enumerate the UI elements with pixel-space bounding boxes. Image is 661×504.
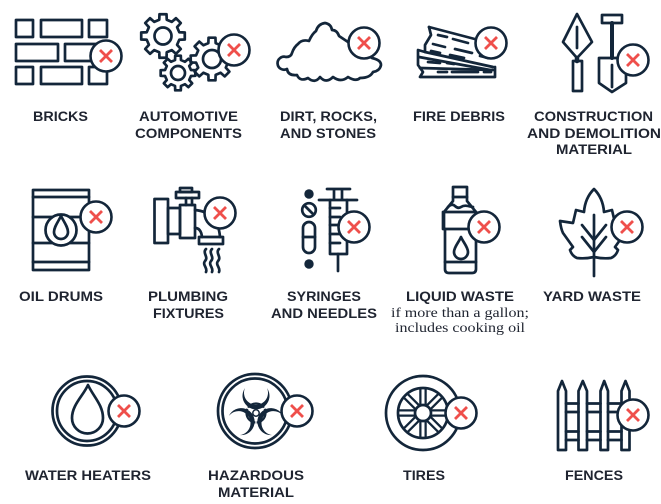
badge: not accepted: [348, 28, 380, 58]
item: oil drums: [19, 190, 112, 304]
label: hazardous material: [208, 468, 304, 500]
label: water heaters: WATER HEATERS: [25, 468, 151, 483]
badge: not accepted: [612, 212, 642, 242]
icon: tire and wheel: [386, 376, 460, 450]
item: liquid waste: [391, 187, 529, 336]
icon: syringe and pills: [302, 189, 357, 271]
label: syringes and needles: SYRINGES: [287, 289, 361, 304]
label: oil drums: OIL DRUMS: [19, 289, 103, 304]
icon: faucet and pipe: [154, 188, 223, 272]
label: construction and demolition material: [527, 109, 661, 157]
label: dirt, rocks, and stones: DIRT, ROCKS,: [280, 109, 377, 124]
item: hazardous material: [208, 374, 312, 500]
label: liquid waste: [391, 289, 529, 336]
badge: not accepted: [218, 34, 250, 66]
icon: burnt planks: [418, 27, 495, 77]
label: hazardous material: MATERIAL: [218, 485, 294, 500]
label: dirt, rocks, and stones: [280, 109, 377, 141]
badge: not accepted: [476, 28, 506, 58]
item: fences: [558, 381, 648, 483]
badge: not accepted: [90, 40, 122, 72]
icon: oil drum: [33, 190, 89, 270]
icon: bricks: [16, 20, 107, 84]
label: plumbing fixtures: PLUMBING: [148, 289, 228, 304]
item: bricks: [16, 20, 122, 124]
label: yard waste: YARD WASTE: [543, 289, 641, 304]
item: plumbing fixtures: [148, 188, 236, 321]
badge: not accepted: [282, 396, 312, 426]
label: automotive components: COMPONENTS: [135, 126, 242, 141]
label: syringes and needles: AND NEEDLES: [271, 306, 377, 321]
item: construction and demolition material: [527, 14, 661, 157]
label: automotive components: AUTOMOTIVE: [139, 109, 238, 124]
label: tires: TIRES: [403, 468, 445, 483]
item: water heaters: [25, 376, 151, 483]
label: plumbing fixtures: [148, 289, 228, 321]
label: fire debris: FIRE DEBRIS: [413, 109, 505, 124]
label: dirt, rocks, and stones: AND STONES: [280, 126, 376, 141]
icon: trowel and shovel: [563, 14, 626, 92]
label: liquid waste: LIQUID WASTE: [406, 289, 514, 304]
label: liquid waste: if more than a gallon;: [391, 306, 529, 321]
item: dirt, rocks, and stones: [278, 23, 381, 141]
label: construction and demolition material: MATERIAL: [556, 142, 632, 157]
badge: not accepted: [338, 212, 370, 242]
icon: dirt pile: [278, 23, 381, 81]
badge: not accepted: [446, 398, 476, 428]
item: fire debris: [413, 27, 506, 124]
icon: water drop in rings: [52, 376, 122, 446]
badge: not accepted: [618, 400, 648, 430]
icon: picket fence: [558, 381, 630, 450]
label: construction and demolition material: AND DEMOLITION: [527, 126, 661, 141]
badge: not accepted: [80, 202, 112, 232]
label: liquid waste: includes cooking oil: [395, 321, 525, 336]
item: automotive components: [135, 14, 250, 141]
badge: not accepted: [468, 212, 500, 242]
icon: bottle: [443, 187, 476, 273]
icon: gears: [141, 14, 233, 90]
label: plumbing fixtures: FIXTURES: [153, 306, 224, 321]
badge: not accepted: [108, 396, 140, 426]
label: hazardous material: HAZARDOUS: [208, 468, 304, 483]
item: tires: [386, 376, 476, 483]
icon: biohazard symbol: [218, 374, 292, 448]
label: bricks: BRICKS: [33, 109, 88, 124]
item: yard waste: [543, 189, 642, 304]
icon: leaf: [560, 189, 628, 276]
label: automotive components: [135, 109, 242, 141]
badge: not accepted: [204, 198, 236, 228]
item: syringes and needles: [271, 189, 377, 321]
label: construction and demolition material: CONSTRUCTION: [534, 109, 653, 124]
label: fences: FENCES: [565, 468, 623, 483]
badge: not accepted: [618, 44, 648, 76]
label: syringes and needles: [271, 289, 377, 321]
